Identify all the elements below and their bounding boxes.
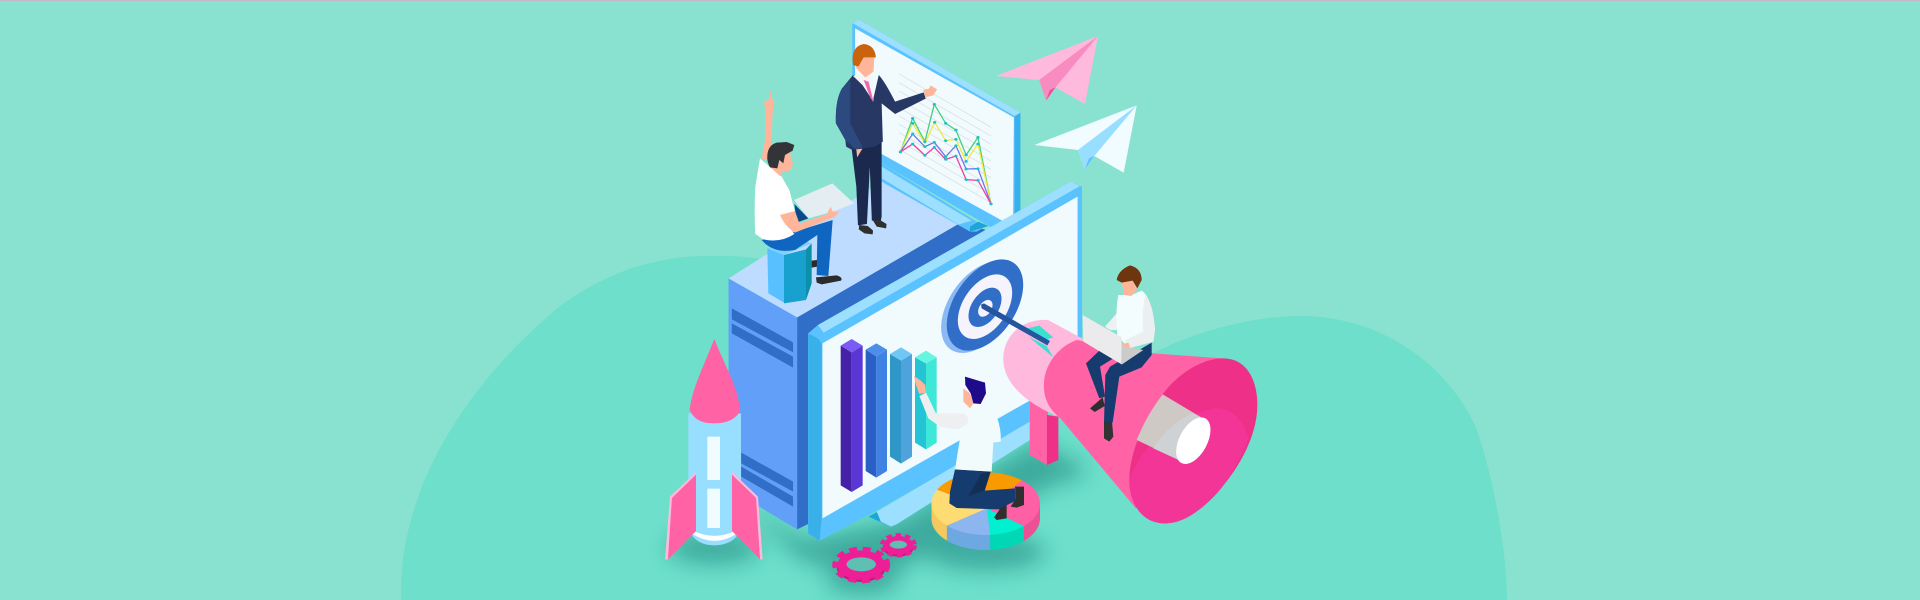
server vent stripes [732,308,793,507]
hair [1117,265,1142,288]
presenter legs [851,142,882,225]
rocket body [688,413,741,545]
rocket windows [707,437,720,528]
upper monitor [852,19,1020,241]
stool [767,237,812,303]
chart grid lines [899,74,991,203]
monitor top edge [818,182,1080,333]
hair [767,142,794,168]
ground shadows [668,440,1084,594]
megaphone driver [1137,394,1218,470]
pie side [932,504,1040,550]
rocket nose [690,339,740,423]
tie [864,80,873,102]
line chart [899,103,993,205]
shirt [1116,291,1155,348]
gears [836,535,915,582]
monitor frame [808,182,1082,541]
person: seated with raised arm [755,90,854,303]
presenter shoes [859,220,887,234]
large gear [836,549,887,582]
bar chart [841,339,937,492]
person: kneeling on pie chart [914,376,1024,520]
hand [1122,343,1130,349]
person: on megaphone with laptop [1083,265,1155,442]
near leg [1104,343,1152,423]
trousers [762,220,833,276]
pie chart [931,472,1040,550]
monitor screen [822,197,1078,518]
megaphone mouth [1129,358,1257,523]
arm [919,393,968,429]
bar 3 [890,347,912,464]
hand in pocket [856,149,862,157]
pink paper plane [996,36,1098,104]
main monitor [808,182,1082,541]
laptop screen [1083,315,1122,364]
far shoe [1090,397,1105,412]
server left face [729,278,797,529]
monitor left side [808,333,822,541]
white paper plane [1034,105,1137,173]
face [770,148,793,177]
hand [914,376,926,394]
presenter hair [853,44,876,67]
background blob [401,256,1507,600]
shirt [755,158,795,241]
dark thigh [794,204,808,223]
bar 2 [866,343,887,478]
person: presenter in suit [836,44,937,234]
server top face [729,173,967,317]
upper monitor screen [855,28,1014,227]
face [963,388,973,408]
megaphone inner shade [1129,408,1248,523]
raised arm [762,90,774,160]
jacket [836,75,926,150]
hair [965,377,986,404]
monitor stand base [869,510,901,527]
near shoe [1104,422,1113,442]
pie top wedges [931,472,1040,535]
upper monitor frame [852,19,1020,241]
laptop base [1122,346,1143,365]
far leg [1086,351,1115,398]
server box [729,173,995,529]
back arm [1105,313,1117,330]
back shoe [812,260,817,268]
megaphone back cylinder [1003,320,1085,417]
small gear [882,535,915,557]
right fin [732,472,763,559]
megaphone post [1030,400,1058,465]
monitor stand [877,422,1030,527]
bar 4 [915,351,937,449]
target [925,246,1039,367]
pointing hand [923,85,937,97]
server right face [797,222,995,529]
shirt collar [853,74,873,102]
rocket [665,339,763,559]
face [1122,280,1137,296]
megaphone [1003,320,1257,523]
left fin [665,472,696,559]
presenter face [856,53,875,77]
sleeve [1125,295,1155,348]
shirt [955,406,1001,472]
front shoe [816,275,842,284]
trousers [949,469,1016,509]
rocket base band [692,530,737,541]
arrow [981,303,1053,357]
forearm [780,207,839,233]
jacket sleeve [836,80,862,150]
boots [994,487,1024,520]
megaphone horn [1044,340,1226,508]
upper monitor stand [882,163,988,232]
bar 1 [841,339,863,492]
paper [794,183,854,218]
